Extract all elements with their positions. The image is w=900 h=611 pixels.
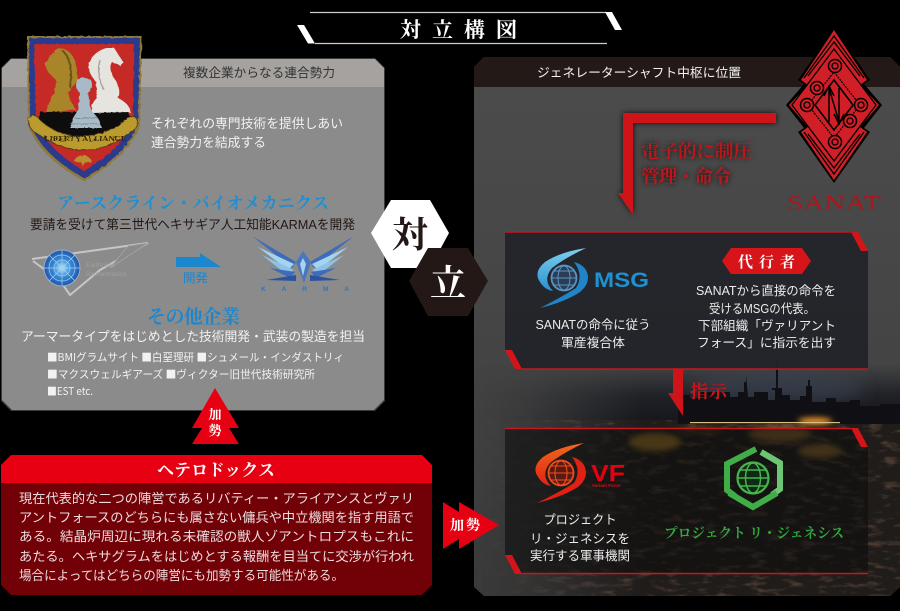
heterodox description: アントフォースのどちらにも属さない傭兵や中立機関を指す用語で [19, 510, 414, 525]
icon: VF logo: VF [591, 460, 625, 486]
heterodox description: あたる。ヘキサグラムをはじめとする報酬を目当てに交渉が行われ [19, 549, 414, 564]
arrow: join up: 勢 [208, 423, 222, 438]
arrow: join up: 加 [208, 407, 222, 422]
company list: ■EST etc. [47, 383, 93, 399]
arrow: join right [443, 502, 499, 549]
MSG description: 軍産複合体 [561, 336, 625, 350]
badge: agent: 代行者 [738, 253, 795, 271]
Project Re-Genesis label: プロジェクト リ・ジェネシス [664, 526, 844, 542]
SANAT side header text: ジェネレーターシャフト中枢に位置 [537, 66, 741, 80]
icon: MSG logo: MSG [594, 268, 649, 292]
agent description: 受けるMSGの代表。 [709, 302, 815, 316]
heading: other companies: その他企業 [147, 305, 240, 328]
panel: SANAT side [474, 57, 900, 596]
control text: 管理・命令 [641, 166, 731, 188]
panel: MSG [505, 232, 868, 369]
icon: Earthcline logo [32, 243, 148, 295]
hexagon: opposition 1 [371, 200, 449, 268]
arrow: instruct [668, 369, 683, 416]
SANAT label: SANAT [787, 191, 881, 215]
other companies description: アーマータイプをはじめとした技術開発・武装の製造を担当 [21, 329, 365, 344]
company list: ■マクスウェルギアーズ ■ヴィクター旧世代技術研究所 [47, 366, 315, 382]
icon: VF logo [535, 443, 625, 503]
arrow: control [618, 113, 776, 215]
control text [641, 142, 752, 188]
icon: Earthcline logo: Biomechanics [86, 271, 127, 278]
fleur [74, 155, 92, 167]
white knight [88, 48, 130, 113]
agent description: 下部組織「ヴァリアント [698, 318, 836, 333]
heterodox description: 場合によってはどちらの陣営にも加勢する可能性がある。 [19, 568, 344, 583]
VF description [530, 513, 630, 563]
instruct text: 指示 [690, 382, 729, 402]
panel: VF [505, 428, 868, 574]
icon: SANAT emblem [786, 27, 882, 215]
panel: heterodox [1, 455, 432, 595]
icon: KARMA logo: KARMA [261, 286, 349, 293]
gold knight [45, 48, 78, 112]
hexagon: opposition 2 [409, 248, 488, 316]
coalition description: 連合勢力を結成する [151, 135, 266, 150]
agent description: SANATから直接の命令を [696, 283, 836, 298]
icon: Earthcline logo: Earthcline [86, 262, 115, 269]
arrow: development: 開発 [183, 271, 208, 285]
hexagon: opposition 2: 立 [430, 263, 466, 303]
title [297, 12, 622, 44]
company list: ■BMIグラムサイト ■白堊理研 ■シュメール・インダストリィ [47, 349, 344, 365]
MSG description: SANATの命令に従う [536, 317, 650, 332]
icon: MSG logo [537, 248, 649, 308]
icon: VF logo: Variant Force [592, 483, 621, 488]
icon: coalition shield: LIBERTY ALLIANCE [44, 134, 126, 143]
coalition description: それぞれの専門技術を提供しあい [151, 116, 343, 131]
coalition description [151, 116, 343, 150]
agent description [696, 283, 836, 350]
panel: coalition [1, 58, 385, 411]
Earthcline description: 要請を受けて第三世代ヘキサギア人工知能KARMAを開発 [30, 217, 355, 232]
company list [47, 349, 344, 399]
arrow: development [176, 253, 221, 285]
arrow: join right: 加勢 [450, 517, 480, 534]
pawn [70, 78, 102, 128]
heterodox header [1, 455, 432, 483]
hexagon: opposition 1: 対 [392, 215, 428, 255]
title: 対立構図 [400, 18, 517, 42]
icon: Project Re-Genesis [727, 449, 780, 507]
VF description: リ・ジェネシスを [530, 532, 630, 546]
VF description: プロジェクト [544, 513, 616, 527]
icon: KARMA logo [252, 236, 354, 293]
heading: Earthcline: アースクライン・バイオメカニクス [57, 194, 329, 213]
heterodox heading: ヘテロドックス [157, 461, 275, 480]
heterodox description: 現在代表的な二つの陣営であるリバティー・アライアンスとヴァリ [19, 491, 414, 506]
SANAT side header [474, 57, 900, 87]
agent description: フォース」に指示を出す [697, 335, 836, 350]
heterodox description [19, 491, 414, 583]
arrow: join up [192, 388, 239, 444]
MSG description [536, 317, 650, 350]
scroll [28, 115, 138, 150]
icon: coalition shield [27, 36, 142, 181]
control text: 電子的に制圧 [641, 142, 752, 163]
coalition header: 複数企業からなる連合勢力 [183, 65, 335, 80]
heterodox description: ある。結晶炉周辺に現れる未確認の獣人ゾアントロプスもこれに [19, 529, 414, 544]
VF description: 実行する軍事機関 [530, 548, 630, 563]
background: ruined city [521, 370, 900, 596]
badge: agent [722, 248, 811, 274]
